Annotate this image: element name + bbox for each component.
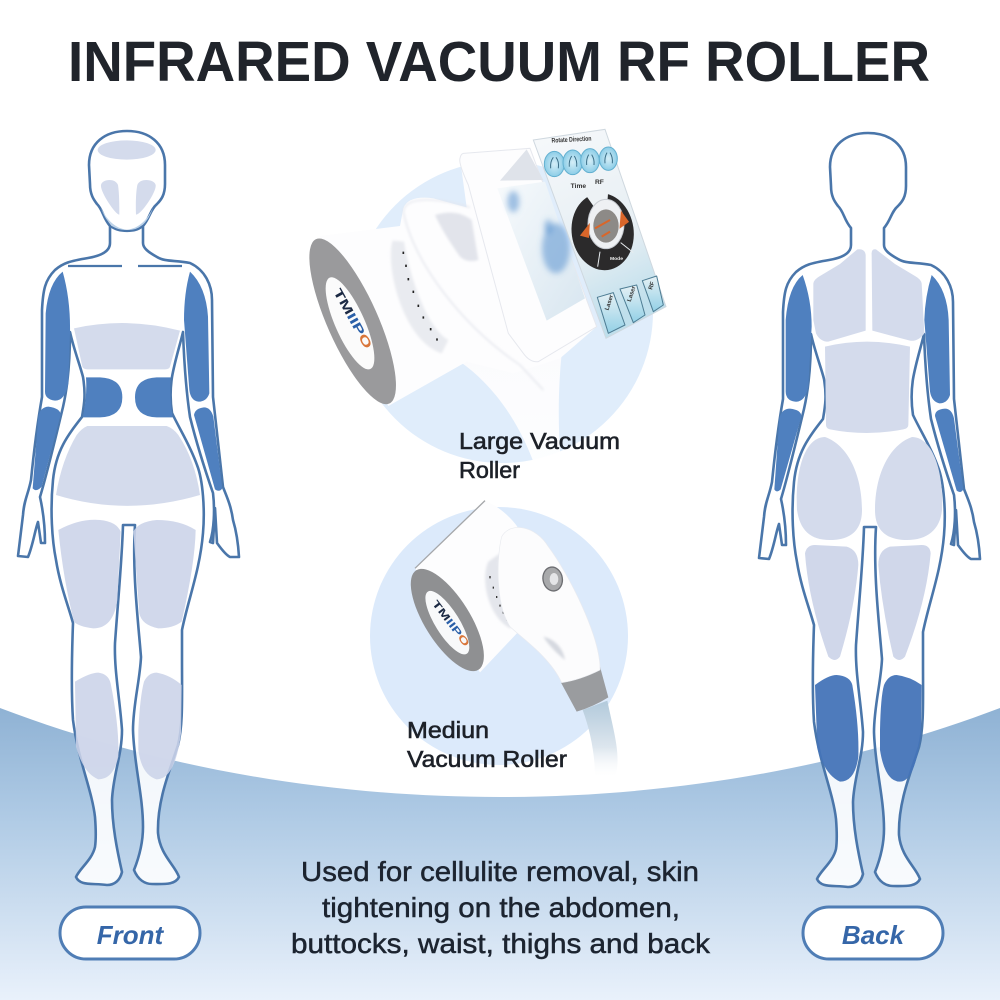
back lower zones (805, 545, 931, 782)
handle recess (435, 213, 478, 261)
medium roller label: Mediun (407, 717, 489, 743)
medium roller label (407, 717, 567, 772)
panel button 3 (642, 276, 663, 312)
grey roller disc (293, 229, 412, 414)
dial inner (593, 209, 619, 243)
head top edge (415, 501, 485, 568)
rotate arrows (551, 153, 612, 168)
title: INFRARED VACUUM RF ROLLER (68, 30, 930, 94)
medium roller blue circle (370, 507, 628, 765)
hose (583, 701, 618, 777)
tablet screen (497, 182, 585, 321)
arch handle highlight (403, 200, 543, 390)
brand text: TM IIP O (330, 286, 375, 352)
panel button 2 (620, 285, 645, 323)
front lower zones (58, 520, 196, 779)
power button (541, 566, 564, 592)
front jaw and collar lines (68, 226, 182, 266)
front jaw shading (101, 208, 153, 230)
calf zones (815, 675, 922, 782)
laser label 2: Laser (627, 285, 638, 303)
rotate buttons (544, 147, 617, 177)
large roller blue circle (351, 161, 653, 463)
dotted band (485, 553, 520, 628)
roller head body (415, 501, 520, 672)
grey collar (561, 667, 608, 712)
large roller label: Large Vacuum (459, 428, 620, 454)
white disc label (316, 272, 384, 375)
cheek zones (101, 180, 156, 215)
front outline (18, 131, 239, 885)
dial orange indicators (582, 213, 628, 237)
forehead zone (98, 140, 156, 160)
description text: buttocks, waist, thighs and back (291, 928, 711, 959)
medium vacuum roller device (397, 501, 618, 777)
handle stem (460, 353, 565, 500)
band dots (403, 252, 437, 341)
hamstring zones (805, 545, 931, 660)
background curved wave (0, 708, 1000, 1000)
grip handle (498, 527, 600, 683)
panel labels: Time (571, 183, 586, 190)
thigh zones (58, 520, 196, 628)
panel rf label: RF (595, 179, 604, 186)
description text (291, 856, 711, 959)
dotted ring band (391, 241, 448, 353)
upper arm zones (45, 272, 209, 402)
forearm zones (33, 407, 222, 491)
panel button 1 (597, 293, 625, 333)
large vacuum roller device (293, 129, 666, 500)
large roller label: Roller (459, 457, 520, 483)
device white base (320, 148, 597, 406)
dial top notch (583, 188, 608, 224)
tablet body (460, 148, 597, 362)
forearm zones (774, 409, 963, 492)
band dots (490, 576, 507, 620)
front upper zones (33, 140, 222, 506)
panel heading: Rotate Direction (551, 136, 592, 145)
knee zones (75, 673, 182, 779)
brand text: TM IIP O (429, 599, 471, 649)
lower back zone (825, 342, 910, 433)
mode text: Mode (610, 256, 623, 262)
back body figure (759, 133, 980, 887)
glute zones (797, 437, 942, 540)
button centre (550, 573, 558, 585)
screen flower (507, 191, 570, 273)
dial dark ring (567, 189, 639, 274)
grey disc (397, 558, 498, 682)
laser label 1: Laser (605, 294, 615, 311)
back outline (759, 133, 980, 887)
back button (803, 907, 943, 959)
chest zone (74, 323, 180, 369)
front button (60, 907, 200, 959)
dial centre (588, 199, 624, 249)
front button: Front (97, 920, 165, 950)
tablet top wedge (500, 149, 543, 181)
back upper zones (774, 249, 963, 492)
upper back zones (813, 249, 924, 342)
abdomen zone (56, 426, 200, 506)
grip shading (543, 637, 565, 660)
large roller label (459, 428, 620, 483)
back button: Back (842, 920, 906, 950)
disc label (418, 585, 477, 660)
upper arm zones (786, 275, 950, 403)
front body figure (18, 131, 239, 885)
description text: Used for cellulite removal, skin (301, 856, 699, 887)
description text: tightening on the abdomen, (322, 892, 680, 923)
waist zones (83, 377, 173, 417)
medium roller label: Vacuum Roller (407, 746, 567, 772)
rf button label: RF (648, 281, 656, 291)
dial dividers (598, 243, 633, 267)
control panel (533, 129, 666, 338)
